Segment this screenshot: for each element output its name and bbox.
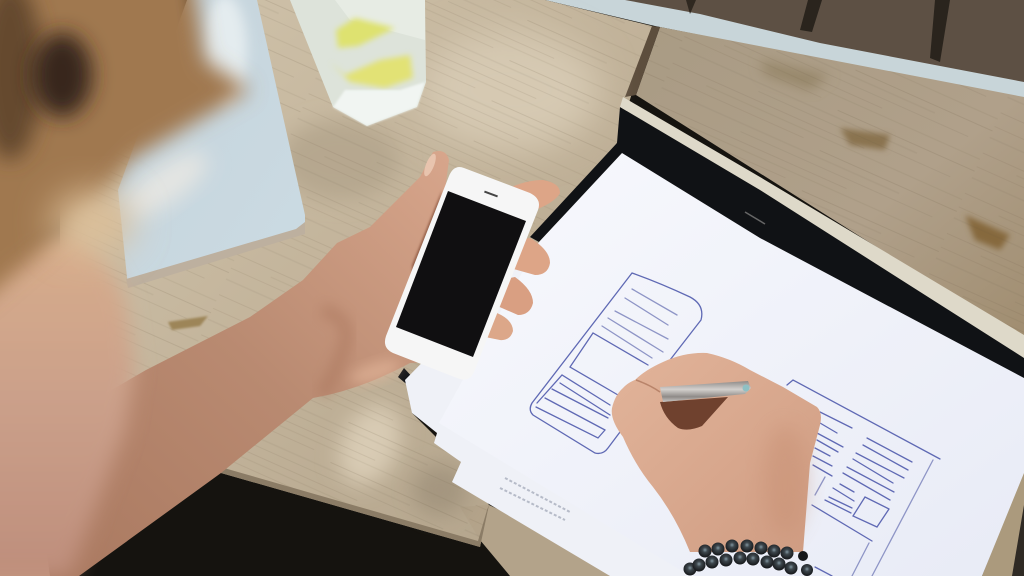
- drinking glass: [290, 0, 426, 126]
- pen: [660, 381, 751, 402]
- blurred head in foreground: [0, 0, 250, 576]
- right hand with pen: [612, 353, 821, 552]
- faint print on lower sheet: [500, 478, 570, 520]
- side shading: [763, 425, 807, 535]
- gap shadow between fingers: [660, 397, 728, 430]
- black folder with cream flap: [398, 97, 1024, 398]
- hand: [612, 353, 821, 552]
- thumb nail: [422, 152, 438, 178]
- wireframe sketch: left phone: [530, 273, 702, 453]
- wrist crease shadow: [322, 310, 346, 395]
- fingers behind phone: [505, 180, 560, 212]
- left arm and hand holding phone: [30, 151, 560, 576]
- wireframe sketch: right phone: [787, 380, 940, 576]
- arm and palm: [30, 151, 470, 576]
- smartphone: [385, 167, 539, 380]
- stacked paper sheets: [405, 153, 1024, 576]
- thumb crease: [636, 380, 660, 392]
- bead bracelet: [684, 540, 813, 576]
- palm highlight: [347, 355, 403, 389]
- skin base at frame bottom: [0, 420, 50, 576]
- gap between thumb and phone: [412, 190, 442, 300]
- laptop: [114, 0, 305, 288]
